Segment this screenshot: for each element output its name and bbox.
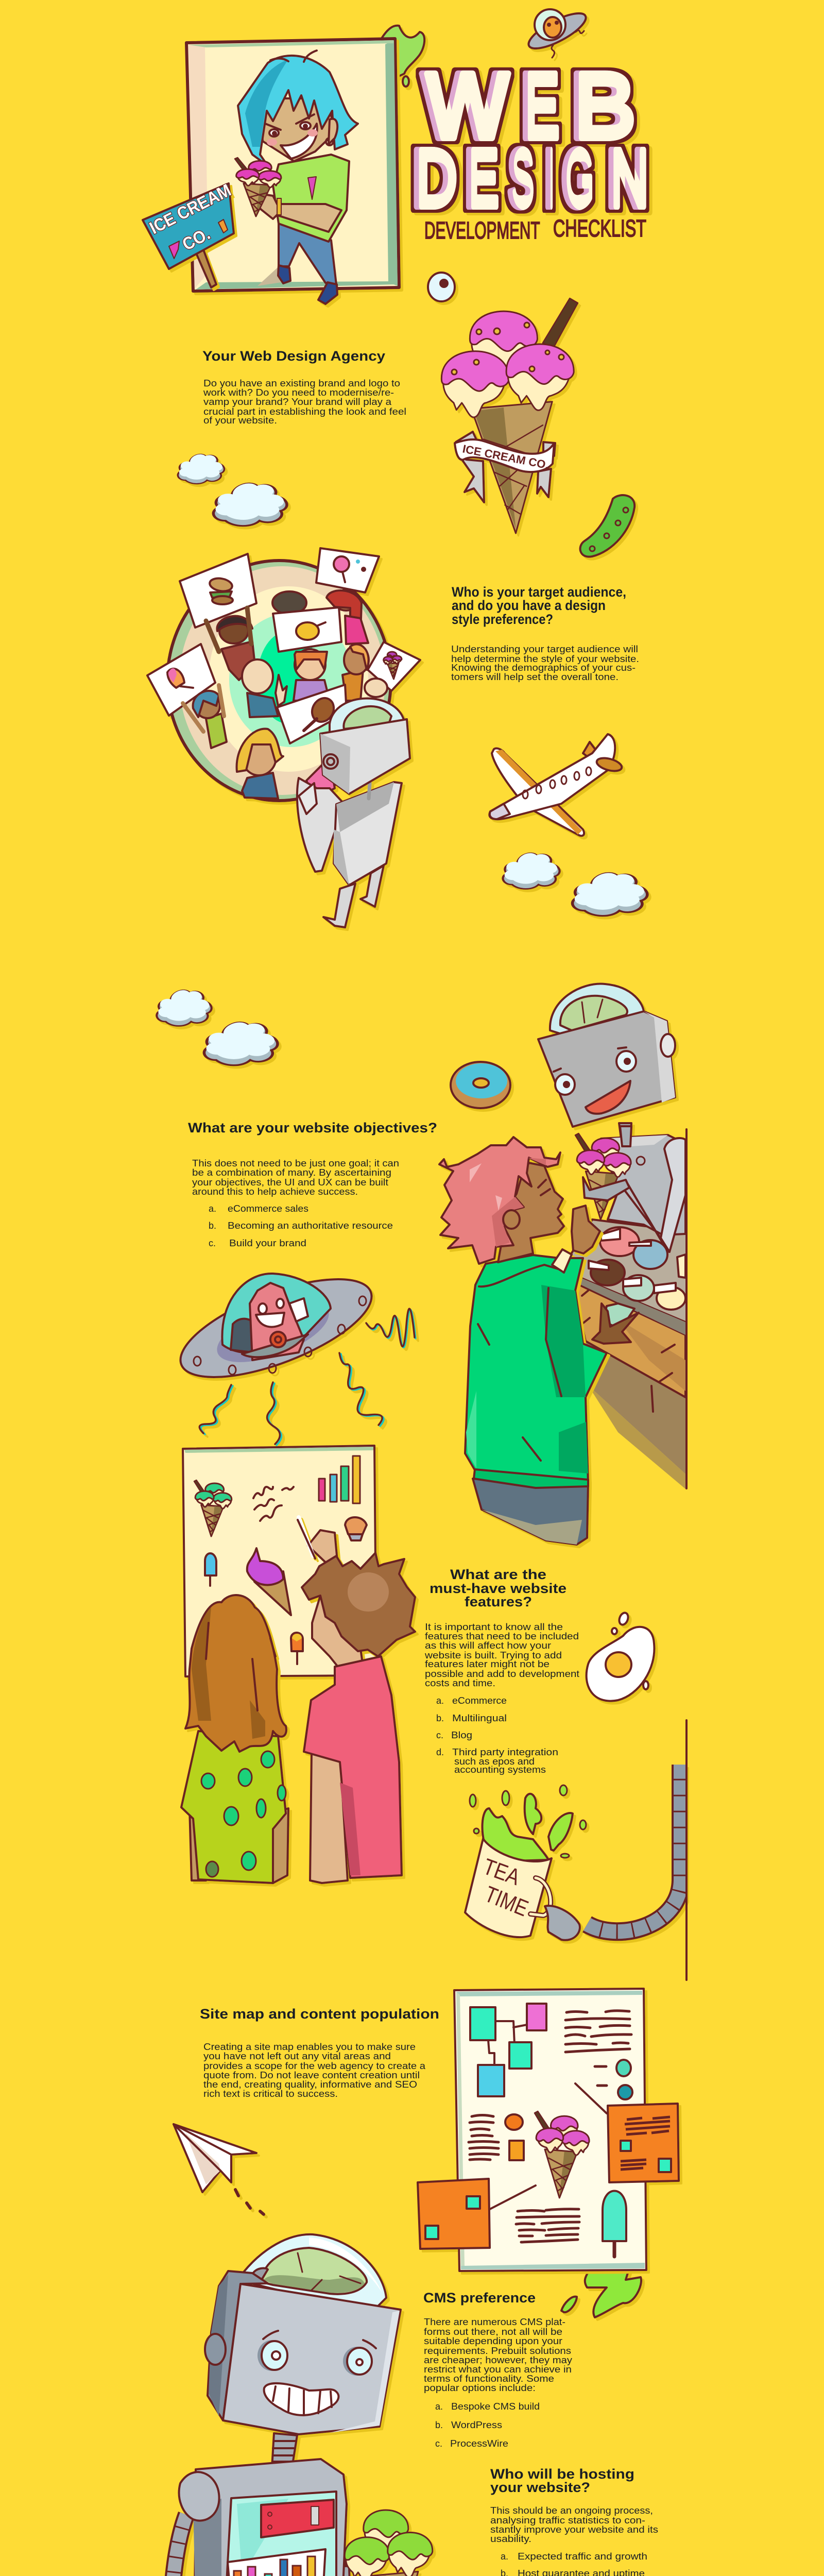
sign: chicken — [277, 685, 347, 743]
heading: target audience: and do you have a design — [452, 598, 606, 613]
illustration: big robot with ice creams — [171, 2234, 435, 2576]
panel: portrait of girl in frame — [186, 39, 399, 304]
text block: must-have features: c. — [436, 1730, 443, 1740]
text block: cms preference: Bespoke CMS build — [451, 2401, 540, 2412]
title: web design: D — [412, 132, 457, 224]
text block: hosting: a. — [501, 2551, 508, 2562]
robot head — [205, 2234, 401, 2434]
right arm — [341, 2567, 415, 2576]
text block: site map — [203, 2042, 426, 2099]
icon: blue donut — [451, 1062, 510, 1108]
illustration: woman with long hair and dress — [181, 1595, 288, 1883]
text block: site map: you have not left out any vital areas and — [203, 2051, 391, 2061]
text block: objectives: Becoming an authoritative resource — [228, 1221, 393, 1231]
tubs of ice cream — [589, 1227, 685, 1310]
text block: cms preference: popular options include: — [424, 2383, 536, 2393]
icon: floating eye — [428, 273, 455, 301]
bar chart panel — [228, 2549, 325, 2576]
bar chart on poster — [319, 1456, 360, 1503]
heading: hosting: your website? — [490, 2480, 590, 2495]
text block: site map: provides a scope for the web agency to create a — [203, 2061, 426, 2071]
text block: must-have features: costs and time. — [425, 1678, 495, 1688]
text block: cms preference: WordPress — [451, 2420, 502, 2430]
text block: objectives: a. — [209, 1204, 216, 1214]
sign: lollipop — [316, 548, 379, 592]
text block: must-have features: as this will affect how your — [425, 1640, 551, 1651]
heading: target audience — [452, 584, 626, 627]
sign: popsicle — [147, 644, 215, 716]
illustration: tea time mug held by robot arm: TEA — [480, 1854, 524, 1890]
text block: must-have features: possible and add to development — [425, 1669, 579, 1679]
icon: paper plane left — [174, 2124, 264, 2214]
heading: target audience: Who is your target audience, — [452, 584, 626, 600]
text block: must-have features: features that need to be included — [425, 1631, 579, 1641]
person: bald man — [242, 659, 287, 717]
text block: hosting — [490, 2505, 658, 2576]
person: woman in orange top — [342, 645, 387, 701]
text block: cms preference: are cheaper; however, they may — [424, 2355, 572, 2365]
scoop sprinkles — [452, 323, 564, 375]
text block: must-have features: such as epos and — [454, 1756, 535, 1767]
title: web design: G — [561, 132, 593, 224]
text block: cms preference: b. — [435, 2420, 443, 2430]
text block: objectives: your objectives, the UI and UX can be built — [192, 1177, 388, 1188]
title: web design: I — [544, 132, 554, 224]
icon: ice cream co sign: ICE CREAM — [146, 180, 234, 238]
text block: must-have features: d. — [436, 1747, 444, 1757]
text block: target audience: Knowing the demographics of your cus- — [451, 663, 636, 673]
text block: agency: of your website. — [203, 415, 277, 426]
text block: objectives: be a combination of many. By ascertaining — [192, 1167, 391, 1178]
text block: must-have features: a. — [436, 1696, 444, 1706]
text block: cms preference: suitable depending upon your — [424, 2336, 562, 2346]
orange card right — [608, 2104, 679, 2182]
text block: objectives: Build your brand — [229, 1238, 306, 1248]
icon: big ice cream with banner: ICE CREAM CO. — [461, 442, 550, 471]
text block: objectives: This does not need to be just one goal; it can — [192, 1158, 399, 1168]
sign: burger — [180, 554, 256, 628]
text block: agency: Do you have an existing brand and logo to — [203, 378, 400, 388]
icon: fried egg — [587, 1612, 654, 1701]
title: web design: E — [465, 132, 499, 224]
text block: must-have features: features later might not be — [425, 1659, 550, 1669]
text block: must-have features: website is built. Trying to add — [424, 1650, 562, 1660]
illustration: ufo with monster — [169, 1259, 416, 1445]
text block: cms preference: ProcessWire — [450, 2438, 508, 2449]
text block: site map: Creating a site map enables you to make sure — [203, 2042, 416, 2052]
icon: cloud pair top — [178, 454, 287, 526]
text block: cms preference: a. — [435, 2401, 443, 2412]
text block: must-have features — [424, 1622, 579, 1775]
text block: objectives — [192, 1158, 399, 1248]
girl figure — [235, 50, 358, 304]
orange card left — [418, 2179, 490, 2249]
heading: hosting: Who will be hosting — [490, 2466, 634, 2482]
text block: must-have features: eCommerce — [452, 1696, 507, 1706]
text block: objectives: c. — [209, 1238, 216, 1248]
title: web design: W — [422, 53, 508, 158]
text block: hosting: usability. — [490, 2534, 531, 2544]
person: girl with orange hair — [294, 649, 330, 701]
robot torso and arms behind case — [601, 1126, 685, 1252]
torso — [179, 2459, 347, 2576]
person: blonde man — [237, 729, 283, 799]
text block: must-have features: It is important to know all the — [425, 1622, 563, 1632]
text block: cms preference: forms out there, not all will be — [424, 2327, 562, 2337]
text block: must-have features: b. — [436, 1713, 444, 1723]
person: dark haired woman — [206, 608, 255, 680]
text block: hosting: stantly improve your website and its — [490, 2524, 658, 2535]
squiggle antennae — [199, 1309, 416, 1445]
illustration: man in red shirt — [298, 1517, 415, 1883]
text block: hosting: This should be an ongoing process, — [490, 2505, 653, 2516]
illustration: customer in green sweater — [439, 1137, 607, 1545]
robot arm — [545, 1765, 681, 1940]
ice cream in robot hand green — [345, 2501, 435, 2576]
title: web design: N — [607, 132, 648, 224]
text block: target audience: Understanding your target audience will — [451, 644, 638, 654]
title: web design: S — [508, 132, 534, 224]
heading: your web design agency: Your Web Design Agency — [202, 348, 385, 364]
ice cream in robot hand pink — [171, 2573, 263, 2576]
text block: objectives: eCommerce sales — [228, 1204, 308, 1214]
green splash behind portrait — [368, 26, 424, 87]
heading: site map: Site map and content population — [200, 2006, 439, 2022]
text block: must-have features: Blog — [451, 1730, 472, 1740]
divider: right maroon rule upper — [685, 1129, 688, 1488]
text block: must-have features: Multilingual — [452, 1713, 507, 1723]
title: web design: E — [521, 53, 559, 158]
text block: hosting: Expected traffic and growth — [518, 2551, 647, 2562]
icon: ice cream co sign: CO. — [179, 224, 213, 255]
heading: hosting — [490, 2466, 634, 2495]
illustration: tea time mug held by robot arm: TIME — [481, 1882, 531, 1921]
subtitle: development checklist: CHECKLIST — [553, 215, 646, 242]
person: woman in pink dress — [272, 590, 368, 644]
text block: site map: quote from. Do not leave content creation until — [203, 2070, 420, 2080]
illustration: tea time mug held by robot arm — [465, 1765, 681, 1940]
text block: objectives: b. — [209, 1221, 216, 1231]
text block: must-have features: Third party integration — [452, 1747, 558, 1757]
icon: ice cream co sign — [143, 180, 234, 287]
robot holding ice cream — [575, 1133, 631, 1219]
icon: small alien ufo — [524, 7, 590, 58]
text block: agency — [203, 378, 406, 426]
sign: dessert bowl — [273, 607, 341, 652]
icon: pickle — [580, 495, 634, 557]
panel: site map board — [418, 1989, 679, 2271]
text block: cms preference: terms of functionality. Some — [424, 2374, 554, 2384]
title: web design — [412, 53, 648, 224]
text block: hosting: analysing traffic statistics to con- — [490, 2515, 645, 2526]
title: web design: B — [571, 53, 635, 158]
text scribbles — [469, 2011, 631, 2242]
robot with back to viewer — [297, 699, 410, 927]
heading: objectives: What are your website objectives? — [188, 1120, 437, 1136]
text block: agency: crucial part in establishing the look and feel — [203, 406, 406, 417]
heading: target audience: style preference? — [452, 612, 553, 627]
subtitle: development checklist: DEVELOPMENT — [424, 217, 540, 244]
heading: cms preference: CMS preference — [423, 2290, 536, 2306]
red panel — [261, 2500, 334, 2537]
left arm — [171, 2515, 189, 2576]
text block: agency: vamp your brand? Your brand will play a — [203, 397, 392, 407]
text block: must-have features: accounting systems — [454, 1765, 546, 1775]
icon: green splash under board — [561, 2268, 641, 2317]
person: blue haired girl — [183, 685, 227, 748]
text block: objectives: around this to help achieve success. — [192, 1187, 358, 1197]
text block: agency: work with? Do you need to modernise/re- — [203, 387, 394, 398]
heading: must-have features: must-have website — [430, 1581, 566, 1596]
text block: cms preference: There are numerous CMS plat- — [424, 2317, 565, 2327]
icon: airplane — [489, 734, 623, 836]
illustration: robot head with brain — [538, 984, 675, 1146]
text block: target audience: help determine the style of your website. — [451, 654, 639, 664]
money and hand on counter — [592, 1303, 639, 1344]
sign: ice cream — [368, 642, 420, 691]
icon: big ice cream with banner — [441, 298, 578, 533]
heading: must-have features: features? — [465, 1594, 532, 1609]
panel: poster with drawings — [183, 1446, 376, 1676]
text block: cms preference: requirements. Prebuilt solutions — [424, 2346, 571, 2356]
text block: target audience: tomers will help set the overall tone. — [451, 672, 619, 682]
text block: cms preference — [424, 2317, 572, 2449]
text block: site map: the end, creating quality, informative and SEO — [203, 2079, 417, 2090]
text block: target audience — [451, 644, 639, 682]
text block: cms preference: c. — [435, 2438, 442, 2449]
icon: cloud pair near plane — [503, 853, 647, 916]
illustration: ice cream counter — [570, 1126, 686, 1489]
illustration: audience in circle with robot — [147, 548, 420, 927]
icon: cloud pair left — [157, 990, 278, 1065]
heading: must-have features: What are the — [450, 1567, 546, 1582]
heading: must-have features — [430, 1567, 566, 1609]
text block: cms preference: restrict what you can achieve in — [424, 2364, 572, 2375]
text block: site map: rich text is critical to success. — [203, 2089, 338, 2099]
divider: right maroon rule lower — [685, 1720, 688, 1980]
